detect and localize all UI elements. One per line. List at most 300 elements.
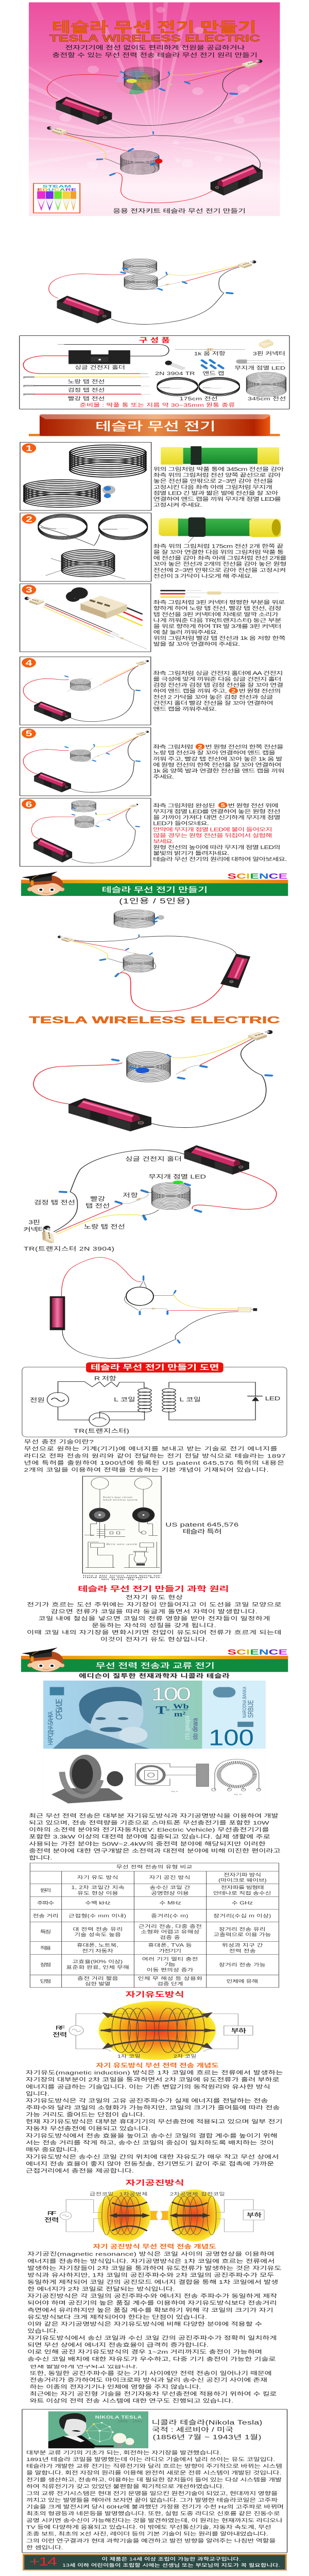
- part: resistor: [175, 349, 245, 357]
- diagram: magnetic resonance: 급전코일: [90, 2191, 113, 2197]
- banknote: NARODNA BANKA: [242, 1687, 248, 1718]
- part: tab wires: 노랑 탭 전선: [67, 379, 105, 384]
- patent figure: Tesla's Four Circuit Tuned System Con-: [83, 1575, 162, 1578]
- text: magnetic induction: 매우 중요합니다.: [26, 2146, 79, 2153]
- table: wireless power types: 검증 단계: [157, 1981, 183, 1987]
- logo: STEAM EDUCARE: [33, 183, 80, 213]
- step 4: 전선 2 가닥을 꼬아 놓은 검정 전선과 싱글: [153, 694, 273, 700]
- diagram: magnetic induction: RF: [56, 2025, 65, 2031]
- step 2: [20, 513, 287, 581]
- kit drawing: large coil and circuit: [33, 1030, 273, 1131]
- circuit lines: [47, 1382, 263, 1427]
- schematic title pill: 테슬라 무선 전기 만들기 도면: [91, 1364, 219, 1372]
- part: coils: [157, 372, 286, 402]
- patent caption: [165, 1521, 238, 1535]
- text: magnetic induction: 서는 전송 거리를 작게 하고, 송수신 코일의 중심이 일치하도록 배치하는 것이: [26, 2139, 274, 2145]
- text: electromagnetic induction: 이때 코일 내의 자기장을 변화시키면 전압이 유도되어 전류가 흐르게 되는데: [27, 1630, 282, 1636]
- step 2: 전선에 2~3번 안팎으로 감아 전선을 고정시켜: [153, 567, 286, 573]
- text: magnetic induction: [26, 2070, 283, 2153]
- diagram labels: 탭 전선: [85, 1203, 110, 1209]
- step 2: 2: [26, 515, 32, 523]
- step 4: 2: [231, 688, 236, 694]
- table: wireless power types: 근접형(수 mm 이내): [68, 1913, 126, 1919]
- section: finished kit: [21, 872, 288, 1131]
- text: magnetic resonance: 이로 인해 공진 자기유도방식의 경우 1~2m 거리까지도 충전이 가능하며: [27, 2349, 262, 2355]
- banknote: Wb: [173, 1703, 189, 1710]
- diagram labels: [23, 1156, 206, 1252]
- step 1: 점멸 LED 긴 발과 짧은 발에 전선을 잘 꼬아: [153, 490, 279, 496]
- banner: wireless power and AC: [21, 1648, 288, 1672]
- step 5: 에 원형 전선의 한쪽 전선을 잘 꼬아 연결하여: [153, 762, 282, 768]
- banner: wireless power and AC: 무선 전력 전송과 교류 전기: [96, 1662, 215, 1670]
- diagram labels: 검정 탭 전선: [34, 1199, 75, 1206]
- illustration: Tesla portrait: [48, 2412, 148, 2448]
- table: wireless power types: 가전기기: [159, 1948, 181, 1954]
- diagram: magnetic resonance: 2차공명체: [170, 2192, 198, 2197]
- table: wireless power types: 무선 전력 전송의 유형 비교: [116, 1865, 192, 1870]
- table: wireless power types: 고출력으로 이용 가능: [213, 1932, 271, 1938]
- text: magnetic induction: 자동차 무선충전에 이용되고 있습니다.: [26, 2125, 150, 2131]
- section: product and parts: [19, 259, 290, 436]
- text: resonance continued: 또한, 동일한 공진주파수를 갖는 기기 사이에만 전력 전송이 일어나기 때문에: [30, 2370, 272, 2376]
- heading: tesla wireless electric bar: [29, 414, 280, 436]
- profile heading: 니콜라 테슬라(Nikola Tesla): [152, 2419, 262, 2426]
- step 1: 고정시킨 다음 좌측 아래 그림처럼 무지개: [153, 484, 272, 490]
- part: battery holder: 싱글 건전지 홀더: [75, 365, 125, 370]
- banknote: СРБИЈЕ: [55, 1699, 64, 1720]
- diagram labels: 싱글 건전지 홀더: [125, 1156, 182, 1162]
- text: recent wireless power: 포함한 3.3kW 이상의 대전력 분야에 집중되고 있습니다. 실제 생활에 주로: [29, 1834, 270, 1840]
- step 3: 탭 전선을 3핀 커넥터에 차례로 딸깍 소리가: [153, 612, 279, 617]
- part: end caps: [200, 359, 225, 376]
- table: wireless power types: 1, 2차 코일간 지속: [71, 1885, 125, 1890]
- patent figure: wave System. Fig. 11.: [101, 1579, 144, 1581]
- table: wireless power types: 주파수: [37, 1901, 54, 1906]
- step 6: 원형 전선의 높이에 따라 무지개 점멸 LED의: [153, 844, 281, 850]
- heading: tesla wireless electric bar: 테슬라 무선 전기: [95, 420, 216, 433]
- text: biography: 기술을 크게 발전시켜 당시 60Hz에 불과했던 가정용 전기가 수천 Hz의 고주파로 바뀌며: [26, 2504, 284, 2510]
- text: magnetic induction: 자기유도방식은 각 코일의 고유 공진주파수가 실제 에너지를 전달하는 전송: [26, 2097, 268, 2104]
- step 3: 에 잘 눌러 끼워주세요.: [153, 629, 218, 635]
- part: 3-pin connector: 3핀 커넥터: [253, 351, 285, 357]
- historical motor figure: Fig. 9.: [171, 1790, 178, 1792]
- text: biography: 테슬라가 개발한 교류 전기는 직류전기와 달리 흐르는 방향이 주기적으로 바뀌는 시스템: [26, 2463, 282, 2469]
- table: wireless power types: 중거리(수 m): [151, 1913, 188, 1919]
- text: magnetic resonance: 동일하게 제작되어 코일 간의 공진모드 에너지 결합을 통해 1차 코일에서 발생: [27, 2279, 278, 2285]
- step 5: 2: [198, 743, 202, 750]
- table: wireless power types: 수 MHz: [159, 1901, 181, 1906]
- text: magnetic induction: 자기유도방식에서 전송 효율을 높이고 송수신 코일의 결합 계수를 높이기 위해: [26, 2132, 278, 2139]
- banknote: T: [156, 1704, 167, 1717]
- notice board: age warning: [24, 2554, 286, 2570]
- text: magnetic resonance: 자기유도방식에서 송신 코일과 수신 코일 간의 공진주파수가 정확히 일치하게: [27, 2335, 277, 2341]
- section: magnetic resonance: [26, 2154, 282, 2362]
- table: wireless power types: 전기 자동차: [82, 1948, 113, 1954]
- patent caption: US patent 645,576: [165, 1521, 238, 1528]
- text: recent wireless power: 합니다.: [29, 1855, 52, 1861]
- title: 테슬라 무선 전기 만들기: [52, 20, 256, 35]
- diagram: magnetic induction: [53, 2001, 253, 2060]
- text: magnetic resonance: 되어야 하며 공진기의 높은 품질 계수를 이용하여 자기유도방식보다 전송거리: [27, 2300, 277, 2306]
- text: resonance continued: 최근에는 자기 공진형 기술을 전기자동차 무선충전에 적용하기 위하여 수 킬로: [30, 2391, 277, 2397]
- table: wireless power types: 장거리 전송 가능: [219, 1962, 266, 1968]
- table: wireless power types: [30, 1863, 279, 1988]
- text: biography: 끼치고 있는 발명들을 헤아려 보자면 끝이 없습니다. 그가 발명한 테슬라코일은 고주파: [26, 2497, 278, 2503]
- step 6: 을 가까이 가져다 대면 신기하게 무지개 점멸: [153, 815, 281, 820]
- step 3: 을 위로 향하게 하여 TR 발 3개를 3핀 커넥터: [153, 623, 282, 629]
- table: wireless power types: 휴대폰, 노트북,: [77, 1943, 118, 1948]
- historical motor figure: Fig. 13.: [234, 1793, 242, 1795]
- caption: 응용 전자키트 테슬라 무선 전기 만들기: [113, 208, 246, 214]
- heading: science principle: 테슬라 무선 전기 만들기 과학 원리: [78, 1585, 229, 1594]
- part: LED: [234, 360, 285, 371]
- caption: magnetic induction: 자기 유도방식 무선 전력 전송 개념도: [96, 2062, 219, 2068]
- illustration: Tesla portrait: 1856 - 1943: [118, 2420, 142, 2423]
- step 3: 발을 잘 꼬아 연결하여 주세요.: [153, 641, 240, 647]
- table: wireless power types: 충전 거리 짧음: [77, 1976, 118, 1981]
- step 6: [20, 798, 287, 866]
- text: electromagnetic induction: [27, 1595, 282, 1642]
- step 1: 고정시켜 주세요.: [153, 502, 202, 507]
- section: labelled circuit: [23, 1145, 277, 1252]
- text: magnetic induction: 자기유도(magnetic induction) 방식은 1차 코일에 흐르는 전류에서 발생하는: [26, 2070, 283, 2076]
- step 5: 5: [26, 730, 32, 738]
- LED symbol: [252, 1397, 259, 1401]
- text: magnetic resonance: 발생하는 자기장들이 2차 코일을 통과하여 유도전류가 발생하는 것은 자기유도: [27, 2265, 282, 2271]
- parts heading: 구 성 품: [139, 337, 170, 344]
- step 5: [20, 727, 285, 796]
- step 6: 번 원형 전선 위에: [228, 803, 279, 808]
- table: wireless power types: 여러 기기 멀티 충전: [142, 1957, 198, 1962]
- step 3: [20, 584, 286, 652]
- part: 3-pin connector: [253, 339, 285, 357]
- step 6: 않을 경우는 원형 전선을 뒤집어서 실험해: [153, 833, 272, 838]
- subtitle: 충전할 수 있는 무선 전력 전송 테슬라 무선 전기 원리 만들기: [52, 52, 258, 58]
- patent caption: 테슬라 특허: [182, 1529, 222, 1535]
- text: recent wireless power: 중전력 분야에 대한 연구개발은 소전력과 대전력 분야에 비해 미진한 편이라고: [29, 1848, 281, 1854]
- part: tab wires: 빨강 탭 전선: [67, 396, 105, 402]
- banknote: m²: [174, 1710, 185, 1718]
- part: tab wires: 검정 탭 전선: [67, 387, 105, 393]
- text: resonance continued: [30, 2363, 277, 2404]
- diagram: magnetic induction: 전력: [53, 2031, 67, 2038]
- step 6: 불빛의 밝기가 틀려지네요.: [153, 851, 229, 856]
- step 1: 좌측 위의 그림처럼 전선 양쪽 끝선으로 감아: [153, 472, 281, 478]
- diagram: magnetic induction: 1차 코일: [117, 2054, 141, 2059]
- text: recent wireless power: 사용되는 가전 분야는 50W~2.4kW의 중전력 분야에 해당되지만 이러한: [29, 1841, 266, 1847]
- text: electromagnetic induction: 전기가 흐르는 도선 주위에는 자기장이 만들어지고 이 도선을 코일 모양으로: [27, 1602, 282, 1608]
- notice board: age warning: +14: [29, 2555, 57, 2568]
- text: resonance continued: 하는 이종의 전자기기나 인체에 영향을 주지 않습니다.: [30, 2384, 201, 2390]
- text: electromagnetic induction: 이것이 전자기 유도 현상입니다.: [100, 1637, 208, 1642]
- text: magnetic resonance: 유도방식보다 크게 제작되어야 한다는 단점이 있습니다.: [27, 2314, 207, 2320]
- text: electromagnetic induction: 전자기 유도 현상: [126, 1595, 183, 1601]
- text: electromagnetic induction: 코일 내에 철심을 넣으면 코일의 전류 영향을 받아 전자들이 일정하게: [39, 1616, 270, 1622]
- table: wireless power types: 유도 현상 이용: [77, 1891, 118, 1896]
- text: magnetic induction: 입니다.: [26, 2090, 49, 2096]
- part: coils: 175cm 전선: [180, 396, 218, 402]
- diagram labels: 3핀: [28, 1219, 40, 1226]
- section: magnetic induction: [26, 1990, 283, 2153]
- part: transistor: 2N 3904 TR: [155, 370, 195, 376]
- text: magnetic induction: 자기장의 대부분이 2차 코일을 통과하면서 2차 코일에 유도전류가 흘러 부하로: [26, 2076, 280, 2082]
- product drawing: [49, 259, 256, 325]
- table: wireless power types: 자기 공진 방식: [149, 1875, 191, 1880]
- caption: magnetic resonance: 자기 공진방식 무선 전력 전송 개념도: [93, 2243, 216, 2249]
- schematic labels: L 코일: [180, 1397, 201, 1403]
- table: wireless power types: 장거리 전송 유리: [219, 1927, 266, 1932]
- step 5: 좌측 그림처럼: [153, 744, 193, 750]
- step 1: 연결하여 앤드 캡을 끼워 무지개 점멸 LED를: [153, 496, 281, 502]
- text: magnetic induction: 현재 자기유도방식은 대부분 휴대기기의 무선충전에 적용되고 있으며 일부 전기: [26, 2119, 283, 2125]
- step 2: 좌측 위의 그림처럼 175cm 전선 2개 한쪽 끝: [153, 543, 284, 549]
- table: wireless power types: 심한 발열: [85, 1981, 111, 1987]
- banner: making the kit: SCIENCE: [227, 872, 287, 880]
- text: recent wireless power: 이하의 소전력 분야와 전기자동차(EV: Electric Vehicle) 무선충전기기를: [29, 1827, 269, 1833]
- table: wireless power types: 자기 유도 방식: [77, 1875, 118, 1880]
- text: magnetic induction: 에너지를 공급하는 기술입니다. 이는 기존 변압기의 동작원리와 유사한 방식: [26, 2083, 270, 2090]
- part: end caps: 앤드 캡: [202, 370, 225, 376]
- diagram: magnetic resonance: RF: [47, 2210, 57, 2216]
- text: biography: 하여 직류전기가 갖고 있었던 불편함을 획기적으로 개선하였습니다.: [26, 2484, 225, 2489]
- historical motor figure: [43, 1750, 266, 1811]
- logo: STEAM EDUCARE: EDUCARE: [37, 188, 76, 192]
- schematic labels: R 저항: [94, 1376, 116, 1382]
- labelled kit diagram: [35, 1145, 277, 1245]
- step 2: 꼬아 놓은 전선과 2개의 전선을 감아 놓은 원형: [153, 561, 287, 567]
- diagram labels: 저항: [123, 1192, 138, 1198]
- diagram: magnetic resonance: 전력: [44, 2217, 59, 2223]
- subtitle: 전자기기에 전선 없이도 편리하게 전원을 공급하거나: [65, 44, 245, 50]
- text: wireless charging explained: 년에 특허를 출원하여 1900년에 등록된 US patent 645,576 특허의 내용은: [24, 1460, 284, 1466]
- text: induction continued: [26, 2154, 279, 2174]
- diagram: magnetic induction: 부하: [231, 2027, 246, 2033]
- text: magnetic resonance: 송수신 코일 배치에 대한 자유도가 우수하고, 다중 기기 충전이 가능한 기술로: [27, 2356, 276, 2362]
- banknote: =: [165, 1707, 170, 1713]
- step 4: 좌측 그림처럼 싱글 건전지 홀더에 AA 건전지: [153, 670, 283, 676]
- diagram labels: 무지개 점멸 LED: [148, 1174, 206, 1180]
- notice board: age warning: 이 제품은 14세 이상 조립이 가능한 과학교구입니다.: [101, 2556, 241, 2562]
- patent figure: Hertz wave system: [106, 1544, 137, 1546]
- table: wireless power types: 표준화 완료, 인체 무해: [66, 1965, 129, 1970]
- step 1: 1: [26, 444, 32, 453]
- text: induction continued: 에너지 전송 효율이 좋지 않아 전동칫솔, 전기면도기 같이 주로 접촉에 가까운: [26, 2161, 274, 2167]
- panel: pink background: [29, 3, 280, 216]
- panel: Nikola Tesla: [22, 2409, 287, 2553]
- step 6: 무지개 점멸 LED를 연결하여 놓은 원형 전선: [153, 809, 281, 815]
- step 6: 테슬라 무선 전기의 원리에 대하여 알아보세요.: [153, 856, 287, 862]
- banknote: sto dinara: [191, 1718, 199, 1740]
- text: magnetic induction: 가능 거리도 줄어드는 단점이 습니다.: [26, 2111, 145, 2117]
- banknote: 100: [150, 1684, 191, 1705]
- section: nikola tesla profile: [22, 2365, 287, 2571]
- text: biography: TV 등에 다양하게 응용되고 있습니다. 이 밖에도 무선통신기술, 자동차 속도계, 무선: [26, 2524, 271, 2530]
- bubbles: [60, 7, 249, 169]
- part: tab wires: [23, 377, 150, 402]
- patent figure: Tesla's four circuit: [102, 1496, 132, 1499]
- illustration: Tesla portrait: NIKOLA TESLA: [95, 2415, 142, 2420]
- text: magnetic resonance: 이와 같은 자기공명방식은 자기유도방식에 비해 다양한 분야에 적용할 수: [27, 2321, 262, 2327]
- top-view kit diagram: [50, 1258, 257, 1359]
- table: wireless power types: 전력 전송: [229, 1948, 256, 1954]
- step 4: 하여 앤드 캡을 끼워 주고,: [153, 688, 227, 694]
- step 1: [20, 442, 284, 510]
- kit drawing: coil over circuit: [58, 910, 250, 1012]
- text: electromagnetic induction: 운동하는 자석의 성질을 갖게 됩니다.: [92, 1622, 216, 1629]
- diagram: magnetic resonance: 부하: [247, 2212, 262, 2218]
- table: wireless power types: 고효율(90% 이상): [72, 1959, 123, 1964]
- step 4: 4: [26, 658, 32, 668]
- step 3: 위의 그림처럼 빨강 탭 전선과 1k 옴 저항 한쪽: [153, 635, 286, 641]
- text: recent wireless power: 최근 무선 전력 전송은 대부분 자기유도방식과 자기공명방식을 이용하여 개발: [29, 1813, 279, 1819]
- diagram labels: 커넥터: [23, 1227, 45, 1233]
- text: biography: 최초의 형광등과 네온등을 발명했습니다. 또한, 실험 도중 라디오 신호를 같은 진동수로: [26, 2511, 280, 2517]
- text: magnetic resonance: 측면에서 유리하지만 높은 품질 계수를 확보하기 위해 각 코일의 크기가 자기: [27, 2307, 273, 2313]
- table: wireless power types: 특징: [40, 1929, 51, 1935]
- table: wireless power types: 송수신 코일 간: [149, 1885, 191, 1890]
- table: wireless power types: 근거리 전송, 다중 충전: [139, 1924, 202, 1929]
- step 4: 를 극성에 맞게 끼워준 다음 싱글 건전지 홀더: [153, 676, 282, 682]
- schematic labels: 전원: [30, 1397, 45, 1403]
- section: patent and science principle: [21, 1476, 288, 1750]
- step 6: LED가 들어오네요.: [153, 821, 209, 826]
- table: wireless power types: 인체에 유해: [226, 1979, 258, 1984]
- step 5: 번 원형 전선의 한쪽 전선을: [205, 744, 284, 750]
- banknote: [43, 1681, 266, 1750]
- schematic labels: [30, 1376, 281, 1434]
- text: recent wireless power: [29, 1813, 281, 1861]
- part: battery holder: [23, 345, 169, 374]
- table: wireless power types: (마이크로 웨이브): [218, 1878, 267, 1883]
- text: magnetic resonance: 되면 무선 상에서 에너지 전송효율이 급격히 증가합니다.: [27, 2342, 209, 2348]
- table: wireless power types: 휴대폰, TVA 등: [148, 1943, 192, 1948]
- kit drawing: transmitter circuit: [47, 59, 262, 126]
- light rays: [29, 3, 280, 166]
- part: transistor: [155, 361, 195, 376]
- text: magnetic resonance: 에너지를 전송하는 방식입니다. 자기공명방식은 1차 코일에 흐르는 전류에서: [27, 2258, 275, 2264]
- banner: making the kit: 테슬라 무선 전기 만들기: [102, 886, 208, 894]
- english title: TESLA WIRELESS ELECTRIC: [49, 33, 260, 43]
- table: wireless power types: 공명현상 이용: [151, 1891, 189, 1896]
- banner: making the kit: [21, 872, 288, 896]
- table: wireless power types: 수 GHz: [232, 1901, 253, 1906]
- step 4: [20, 657, 283, 725]
- heading: magnetic resonance: 자기공진방식: [126, 2179, 184, 2187]
- panel: circuit schematic: [22, 1363, 287, 1437]
- text: magnetic resonance: 한 에너지가 2차 코일로 전달되는 방식입니다.: [27, 2286, 175, 2292]
- table: wireless power types: 위성과 지구 간: [222, 1943, 263, 1948]
- table: wireless power types: 전자파를 빔형태: [221, 1885, 264, 1890]
- text: biography: [26, 2450, 284, 2551]
- table: wireless power types: 장점: [40, 1962, 51, 1968]
- profile heading: 국적 : 세르비아 / 미국: [152, 2427, 233, 2433]
- section: motor and comparison table: [29, 1750, 281, 1988]
- table: wireless power types: 원리: [40, 1888, 51, 1893]
- section: schematic: [22, 1257, 287, 1473]
- text: resonance continued: 와트 이상의 전력 전송 시스템에 대한 연구도 진행되고 있습니다.: [30, 2398, 233, 2404]
- diagram labels: 노랑 탭 전선: [84, 1224, 125, 1230]
- step 6: 좌측 그림처럼 완성된: [153, 803, 215, 808]
- banner: wireless power and AC: SCIENCE: [227, 1648, 287, 1656]
- text: biography: 을 말합니다. 회전 자장의 원리를 이용해 완전히 새로운 전류 시스템이 개발된 것입니다.: [26, 2470, 281, 2476]
- text: biography: 대부분 교류 기기의 기초가 되는, 회전하는 자기장을 발견했습니다.: [26, 2450, 221, 2455]
- part: LED: 무지개 점멸 LED: [234, 365, 285, 371]
- table: wireless power types: 전송 거리: [32, 1913, 59, 1919]
- text: magnetic resonance: 자기공진방식은 각 코일의 공진주파수와 에너지 전송 주파수가 동일하게 제작: [27, 2293, 277, 2299]
- table: wireless power types: 적용: [40, 1945, 51, 1951]
- diagram labels: TR(트랜지스터 2N 3904): [24, 1246, 114, 1252]
- step 5: 끼워 주고, 빨강 탭 전선에 꼬아 놓은 1k 옴 발: [153, 756, 283, 762]
- diagram: magnetic resonance: [44, 2189, 264, 2242]
- schematic labels: L 코일: [114, 1397, 135, 1403]
- patent figure: trasted With the Contemporaneous Hertz-: [83, 1577, 162, 1579]
- step 4: 건전지 홀더 빨강 전선을 잘 꼬아 연결하여: [153, 700, 273, 706]
- diagram: magnetic induction: 2차 코일: [174, 2054, 196, 2059]
- step 2: 을 잘 꼬아 연결한 다음 위의 그림처럼 딱풀 통: [153, 549, 284, 555]
- text: induction continued: 자기유도방식은 송수신 코일 간의 위치에 대한 자유도가 매우 작고 무선 상에서: [26, 2154, 279, 2160]
- step 3: 3: [26, 585, 32, 595]
- step 1: 위의 그림처럼 딱풀 통에 345cm 전선을 감아: [153, 466, 284, 472]
- english title: TESLA WIRELESS ELECTRIC: [29, 1015, 280, 1026]
- step 5: 주세요.: [153, 774, 174, 779]
- table: wireless power types: 장거리(수십 m 이상): [213, 1913, 271, 1919]
- text: biography: 전기를 생산하고, 전송하고, 이용하는 데 필요한 장치들이 들어 있는 다상 시스템을 개발: [26, 2477, 282, 2483]
- subtitle: [52, 44, 258, 58]
- step 6: 5: [221, 802, 225, 808]
- section: assembly steps 4 to 6: [20, 656, 287, 867]
- profile heading: [152, 2419, 262, 2441]
- step 1: 놓은 전선을 안팎으로 2~3번 감아 전선을: [153, 478, 273, 484]
- patent figure: [82, 1477, 162, 1581]
- text: wireless charging explained: [24, 1439, 286, 1473]
- step 2: 에 전선을 감아 좌측 아래 그림처럼 전선 2개를: [153, 555, 287, 561]
- text: biography: 한 셈입니다.: [26, 2545, 63, 2551]
- text: induction continued: 근접거리에서 충전을 제공합니다.: [26, 2167, 134, 2174]
- text: magnetic resonance: 자기공진(magnetic resonance) 방식은 코일 사이의 공명현상을 이용하여: [27, 2251, 274, 2257]
- step 6: 보세요.: [153, 839, 174, 844]
- profile heading: (1856년 7월 ~ 1943년 1월): [153, 2434, 261, 2441]
- text: magnetic resonance: 방식과 유사하지만, 1차 코일의 공진주파수와 2차 코일의 공진주파수가 모두: [27, 2272, 274, 2278]
- logo: STEAM EDUCARE: STEAM: [42, 184, 71, 189]
- step 5: 노랑 탭 전선과 잘 꼬아 연결하여 앤드 캡을: [153, 750, 276, 756]
- subheading: (1인용 / 5인용): [119, 897, 190, 905]
- step 6: 만약에 무지개 점멸 LED에 불이 들어오지: [153, 826, 272, 833]
- text: wireless charging explained: 무선 충전 기술이란?: [24, 1439, 94, 1445]
- heading: magnetic induction: 자기유도방식: [126, 1990, 184, 1998]
- table: wireless power types: 기술 성숙도 높음: [74, 1932, 121, 1938]
- text: biography: 1891년 테슬라 코일을 발명했는데 이는 라디오 기술에서 널리 쓰이는 유도 코일입다.: [26, 2456, 275, 2462]
- text: magnetic resonance: 있습니다.: [27, 2328, 58, 2334]
- section: hero poster: [29, 2, 280, 216]
- schematic labels: TR(트랜지스터): [74, 1428, 129, 1434]
- step 4: 앤드 캡을 끼워주세요.: [153, 706, 217, 712]
- diagram labels: 빨강: [90, 1196, 105, 1202]
- step 4: 검정 전선과 검정 탭 검정 전선을 잘 꼬아 연결: [153, 682, 283, 688]
- patent figure: tuned wireless system: [102, 1499, 138, 1502]
- part: coils: 345cm 전선: [248, 396, 286, 402]
- step 5: 1k 옴 양쪽 발과 연결한 전선을 앤드 캡을 끼워: [153, 768, 285, 774]
- table: wireless power types: 안테나로 직접 송수신: [213, 1891, 271, 1896]
- text: biography: 그의 이런 연구결과가 현대 과학기술을 예견하고 발전 방향을 알려주는 나침반 역할을: [26, 2538, 276, 2544]
- table: wireless power types: 이동 편의성 증가: [146, 1968, 193, 1973]
- note: materials to prepare: 준비물 : 딱풀 통 또는 지름 약 30~35mm 원통 종류: [80, 402, 235, 408]
- diagram: magnetic resonance: 1차공명체: [119, 2192, 147, 2197]
- diagram: magnetic resonance: 집전코일: [201, 2191, 225, 2197]
- step 2: 전선이 3 가닥이 나오게 해 주세요.: [153, 573, 252, 579]
- table: wireless power types: 대 전력 전송 유리: [73, 1927, 123, 1932]
- text: resonance continued: 전송거리가 증가하여도 마이크로파 방식과 달리 송수신 공진기 사이에 존재: [30, 2377, 267, 2383]
- text: magnetic resonance: [27, 2251, 282, 2362]
